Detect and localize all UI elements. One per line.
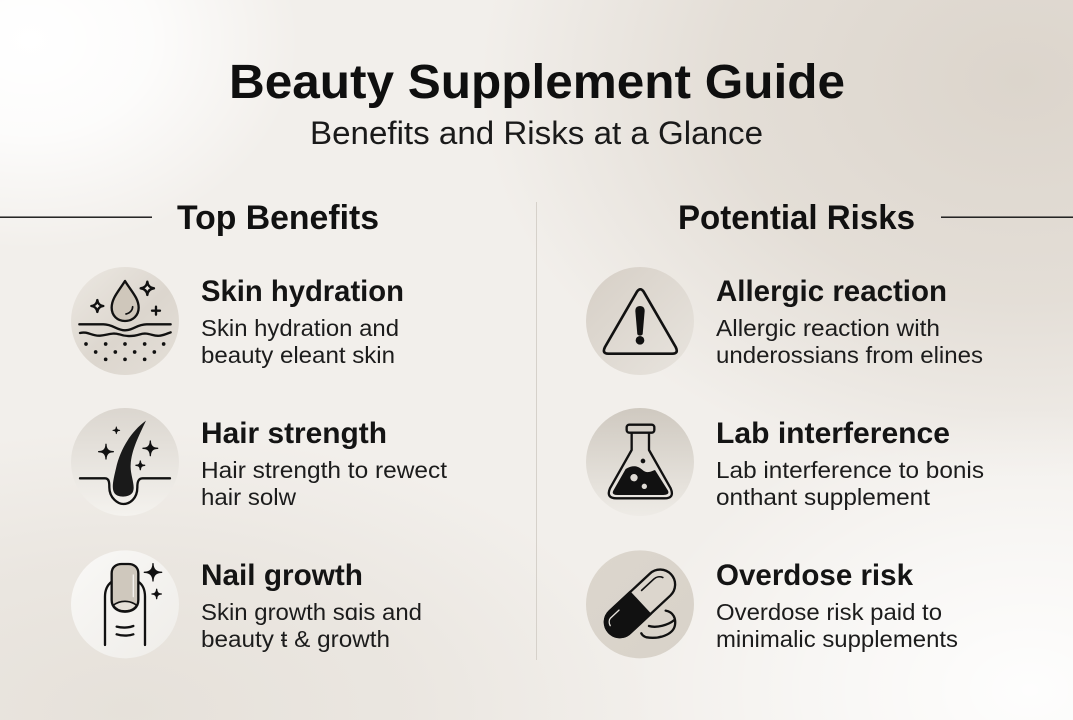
text: lab interference: Lab interference to bonis — [716, 457, 984, 483]
text: skin hydration: beauty eleant skin — [201, 342, 395, 368]
text: hair strength: Hair strength — [201, 417, 387, 450]
item: allergic reaction — [586, 267, 983, 375]
heading: potential risks: Potential Risks — [678, 199, 915, 237]
panel: potential risks — [586, 199, 1073, 658]
heading: top benefits: Top Benefits — [177, 199, 379, 237]
text: lab interference: onthant supplement — [716, 484, 931, 510]
icon: warning triangle — [586, 267, 694, 375]
text: skin hydration — [201, 275, 404, 368]
text: overdose risk: Overdose risk paid to — [716, 599, 942, 625]
text: allergic reaction: Allergic reaction — [716, 275, 947, 308]
title: Beauty Supplement Guide — [229, 56, 845, 109]
item: lab interference — [586, 408, 984, 516]
icon: flask — [586, 408, 694, 516]
text: allergic reaction: Allergic reaction with — [716, 315, 940, 341]
panel: top benefits — [0, 199, 448, 658]
text: skin hydration: Skin hydration — [201, 275, 404, 308]
text: allergic reaction: underossians from elines — [716, 342, 983, 368]
text: overdose risk: minimalic supplements — [716, 626, 958, 652]
text: overdose risk — [716, 559, 958, 652]
text: hair strength — [201, 417, 448, 510]
item: hair strength — [71, 408, 448, 516]
center divider — [536, 202, 537, 660]
text: lab interference: Lab interference — [716, 417, 950, 450]
icon: capsule and tablet — [586, 550, 694, 658]
item: skin hydration — [71, 267, 404, 375]
text: hair strength: Hair strength to rewect — [201, 457, 448, 483]
text: nail growth: Nail growth — [201, 559, 363, 592]
text: lab interference — [716, 417, 984, 510]
text: nail growth: beauty ŧ & growth — [201, 626, 390, 652]
icon: hair follicle — [71, 408, 179, 516]
text: nail growth: Skin growth sɑis and — [201, 599, 422, 625]
item: nail growth — [71, 550, 422, 658]
text: allergic reaction — [716, 275, 983, 368]
subtitle: Benefits and Risks at a Glance — [310, 115, 763, 151]
icon: fingernail — [71, 550, 179, 658]
text: skin hydration: Skin hydration and — [201, 315, 399, 341]
text: overdose risk: Overdose risk — [716, 559, 913, 592]
text: nail growth — [201, 559, 422, 652]
icon: water drop over skin — [71, 267, 179, 375]
item: overdose risk — [586, 550, 958, 658]
text: hair strength: hair solw — [201, 484, 296, 510]
